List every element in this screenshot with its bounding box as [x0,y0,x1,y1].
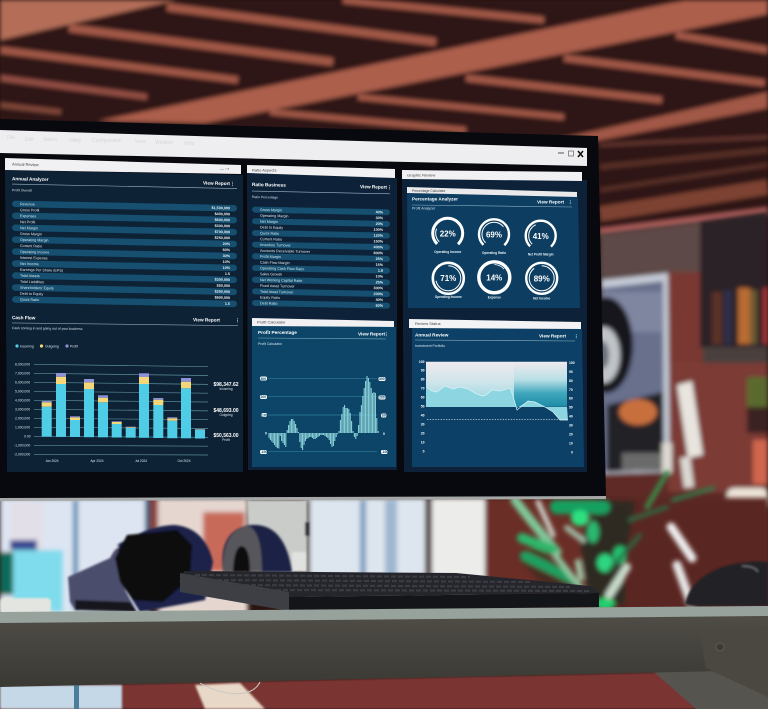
heading: ⋮ [568,199,573,206]
area chart: investment portfolio [419,360,575,455]
gauge: 22% [426,212,469,255]
axis labels: 7,000,000 [15,372,30,376]
cash flow totals: $98,347.62 [213,382,239,388]
table labels: Revenue [20,202,35,206]
menu items: Edit [25,137,34,143]
table values: 30% [376,216,384,220]
table labels: Net Profit [20,220,35,224]
table values: 10% [223,260,231,264]
axis labels: -100 [382,450,388,454]
right axis labels: 30 [569,424,573,428]
chart legend: Outgoing [45,344,59,348]
gauge: 71% [433,263,464,299]
right axis labels: 10 [569,442,573,446]
icon: white object on desk [0,598,51,614]
table values: 30% [223,254,231,258]
left axis labels: 90 [421,369,425,373]
gauge: 22%: 22% [440,230,456,238]
left axis labels: 80 [421,378,425,382]
table labels: Current Ratio [20,244,42,248]
cash flow totals: $50,563.00 [213,433,239,439]
cash flow totals: $48,693.00 [213,408,239,414]
icon: mouse [685,562,768,606]
table labels: Gross Profit [20,208,39,213]
histogram chart: profit percentage [260,376,388,454]
table values: 60% [376,304,384,308]
stacked bar chart: cash flow [14,362,208,463]
axis labels: 1,000,000 [15,426,30,430]
gauge: 69%: 69% [486,230,502,240]
table values: 300% [374,286,384,290]
axis labels: 300 [260,377,266,381]
panel: annual review [5,158,243,472]
heading: Percentage Analyzer [412,196,458,202]
left axis labels [419,360,425,454]
chart heading: Profit Calculator [258,342,283,346]
cash flow heading: ⋮ [235,317,240,324]
axis labels: 6,000,000 [15,380,30,384]
bars: profit [42,373,205,429]
keyboard [179,571,599,611]
menu items: File [7,135,15,141]
window title: Profit Calculator [257,320,286,324]
gauge: 89%: 89% [534,274,550,284]
right axis labels: 50 [569,406,573,410]
table values: 1.5 [225,272,230,276]
table labels: Sales Growth [260,272,282,277]
table values [212,206,231,306]
table labels: Operating Cash Flow Ratio [260,266,304,271]
table labels: Gross Margin [20,232,42,236]
axis labels: 300 [379,377,385,381]
gauge: 89% [526,263,557,300]
axis labels: 200 [260,395,266,399]
table values: $1,500,000 [212,206,230,210]
table labels: Net Income [20,262,39,266]
cash flow heading [12,314,240,333]
monitor frame [0,119,606,501]
monitor stand [247,500,309,575]
table: ratio business: View Report [360,184,387,190]
chart legend: Incoming [20,344,34,348]
table labels: Earnings Per Share (EPS) [20,268,63,273]
table labels: Debt Ratio [260,301,277,306]
axis labels: 200 [379,396,385,400]
gauge: 41%: 41% [533,232,549,241]
chart heading: View Report [358,332,385,336]
table labels: Operating Income [20,250,49,255]
gauge: 89%: Net Income [533,296,551,300]
table labels: Total Assets [20,274,40,278]
axis labels: 0.00 [24,434,31,438]
table values: $250,000 [215,236,230,240]
left axis labels: 10 [421,441,425,445]
gauge: 71%: Operating Income [435,295,462,299]
heading [412,196,573,210]
table: ratio business: ⋮ [387,184,392,191]
right axis labels: 60 [569,397,573,401]
axis labels: 4,000,000 [15,398,30,402]
table labels: Interest Expense [20,256,48,260]
table values: 200% [374,292,384,296]
table values: 400% [374,245,384,249]
window title: Ratio Aspects [252,168,276,172]
table labels: Profit Margin [260,255,281,259]
table labels: Net Margin [260,220,278,224]
table: annual analyzer: Profit Overall [12,188,32,193]
table labels: Accounts Receivable Turnover [260,249,311,254]
background below monitor: windows and brick [0,498,768,618]
table values: 40% [376,210,384,214]
right axis labels [569,361,575,455]
left axis labels: 30 [421,422,425,426]
left axis labels: 40 [421,414,425,418]
right axis labels: 80 [569,379,573,383]
table labels: Operating Margin [260,214,288,218]
gauge: 69%: Operating Ratio [482,251,506,255]
cash flow totals: Outgoing [220,413,233,417]
right axis labels: 100 [569,361,575,365]
window title: Graphic Review [407,172,435,178]
gauge: 14%: 14% [486,274,502,282]
axis labels: 8,000,000 [15,362,30,366]
right axis labels: 70 [569,388,573,392]
table values: $300,000 [215,278,230,282]
heading: Investment Portfolio [415,344,445,348]
menu items: Configuration [92,138,122,144]
table: ratio business: Ratio Percentage [252,195,278,200]
menu items [7,135,195,147]
table values: 15% [376,263,384,267]
application menu bar [0,130,587,166]
cash flow heading: Cash Flow [12,315,36,320]
heading [415,332,579,348]
heading: Annual Review [415,332,449,338]
chart legend: Profit [70,344,78,348]
table values: 100% [374,228,384,232]
table values: 25% [376,257,384,261]
table labels: Net Working Capital Ratio [260,278,302,283]
table labels: Equity Ratio [260,296,280,300]
table labels: Gross Margin [260,208,282,212]
table labels: Current Ratio [260,237,282,242]
table values: $50,000 [217,284,230,288]
month labels: Jul 2024 [135,459,147,463]
table values: $400,000 [215,212,230,216]
axis labels: 0 [265,432,267,436]
heading: ⋮ [574,333,579,340]
right axis labels: 40 [569,415,573,419]
table labels: Expenses [20,214,36,218]
heading: View Report [539,334,566,338]
menu items: Help [184,141,195,147]
menu items: Window [155,140,173,146]
panel: review status [409,319,584,467]
axis labels: -100 [260,450,267,454]
table: annual analyzer: ⋮ [230,180,235,187]
table: annual analyzer [12,176,237,307]
axis labels: 100 [262,413,268,417]
menu items: Utility [69,138,82,144]
table labels [20,202,63,303]
month labels: Oct 2024 [178,459,191,463]
bars: incoming [42,384,205,438]
table values [374,210,384,308]
table values: $300,000 [215,224,230,228]
chart heading: ⋮ [384,331,389,338]
table values: 800% [374,251,384,255]
table values: 20% [223,242,231,246]
left axis labels: 0 [423,450,425,454]
table values: 10% [376,275,384,279]
axis labels [260,376,388,454]
gauge: 14%: Expense [488,296,501,300]
desk [0,606,768,709]
window controls [558,151,583,157]
table values: $800,000 [215,296,230,300]
chart heading [258,330,389,346]
table values: $250,000 [215,290,230,294]
table values: 120% [374,234,384,238]
gauge: 14% [479,262,510,300]
table values: 1.5 [225,302,230,306]
left axis labels: 50 [421,404,425,408]
table labels: Net Margin [20,226,38,230]
axis labels [14,362,31,456]
bars: outgoing [42,377,205,430]
right axis labels: 20 [569,433,573,437]
table values: 40% [376,298,384,302]
table stripes [12,201,237,307]
table labels: Fixed Asset Turnover [260,284,295,289]
axis labels: 0 [383,432,385,436]
table labels: Operating Margin [20,238,48,243]
table: annual analyzer: Annual Analyzer [12,176,49,182]
table values: 25% [376,280,384,285]
chart legend [15,344,78,348]
gauge: 71%: 71% [440,274,456,283]
table: ratio business: Ratio Business [252,182,286,188]
heading: Profit Analyzer [412,206,436,210]
table labels: Debt to Equity [20,292,43,296]
left axis labels: 20 [421,432,425,436]
left axis labels: 100 [419,360,425,364]
table values: 20% [376,222,384,226]
table values: $700,000 [215,230,230,234]
table values: $600,000 [215,218,230,222]
axis labels: -1,000,000 [14,444,30,448]
table labels: Inventory Turnover [260,243,292,248]
table labels: Total Liabilities [20,280,44,284]
table labels: Cash Flow Margin [260,261,290,265]
plant leaves [515,473,713,610]
cash flow heading: View Report [193,317,220,323]
table labels: Quick Ratio [20,298,39,302]
gauge: 69% [473,213,515,256]
cash flow totals: Profit [222,438,230,442]
window title: Review Status [415,321,441,326]
right axis labels: 90 [569,370,573,374]
table values: 150% [374,239,384,244]
table: annual analyzer: View Report [203,181,230,186]
month labels [45,459,191,463]
table labels [260,208,311,306]
table values: 1.8 [378,269,383,273]
gauge: 41% [519,214,562,257]
axis labels: 2,000,000 [15,416,30,420]
axis labels: -2,000,000 [14,452,30,456]
cash flow totals: Incoming [220,387,233,391]
ceiling with wooden beams [0,0,768,240]
table values: 10% [223,266,231,270]
month labels: Jan 2024 [45,459,59,463]
panel: graphic review [402,170,587,472]
panel: percentage analyzer [407,187,580,308]
gauge: 22%: Operating Income [434,250,461,254]
window title: Annual Review [12,162,39,167]
panel: profit calculator [252,318,396,467]
gauge: 41%: Net Profit Margin [528,252,554,256]
chart heading: Profit Percentage [258,330,297,335]
right axis labels: 0 [571,451,573,455]
window title: Percentage Calculator [412,189,446,193]
table labels: Debt to Equity [260,226,283,230]
axis labels: 100 [382,414,387,418]
icon: headphone far ear cup [222,525,292,572]
table labels: Quick Ratio [260,231,279,236]
cash flow heading: Cash coming in and going out of your business [12,326,83,331]
background brick wall with poster, shelf and plant [579,212,768,610]
menu items: Select [43,137,58,143]
table labels: Total Asset Turnover [260,290,294,294]
left axis labels: 60 [421,396,425,400]
table labels: Shareholders' Equity [20,286,54,290]
panel: ratio aspects [247,165,397,470]
table values: 60% [223,248,231,252]
window controls: — ▫ ▪ [220,166,230,171]
left axis labels: 70 [421,387,425,391]
icon: headphone near ear cup [68,525,213,612]
table stripes [252,207,390,309]
menu items: View [135,139,146,145]
axis labels: 3,000,000 [15,408,30,412]
month labels: Apr 2024 [91,459,104,463]
axis labels: 5,000,000 [15,390,30,394]
cash flow totals [213,382,239,442]
heading: View Report [537,200,564,204]
table: ratio business [252,181,392,309]
